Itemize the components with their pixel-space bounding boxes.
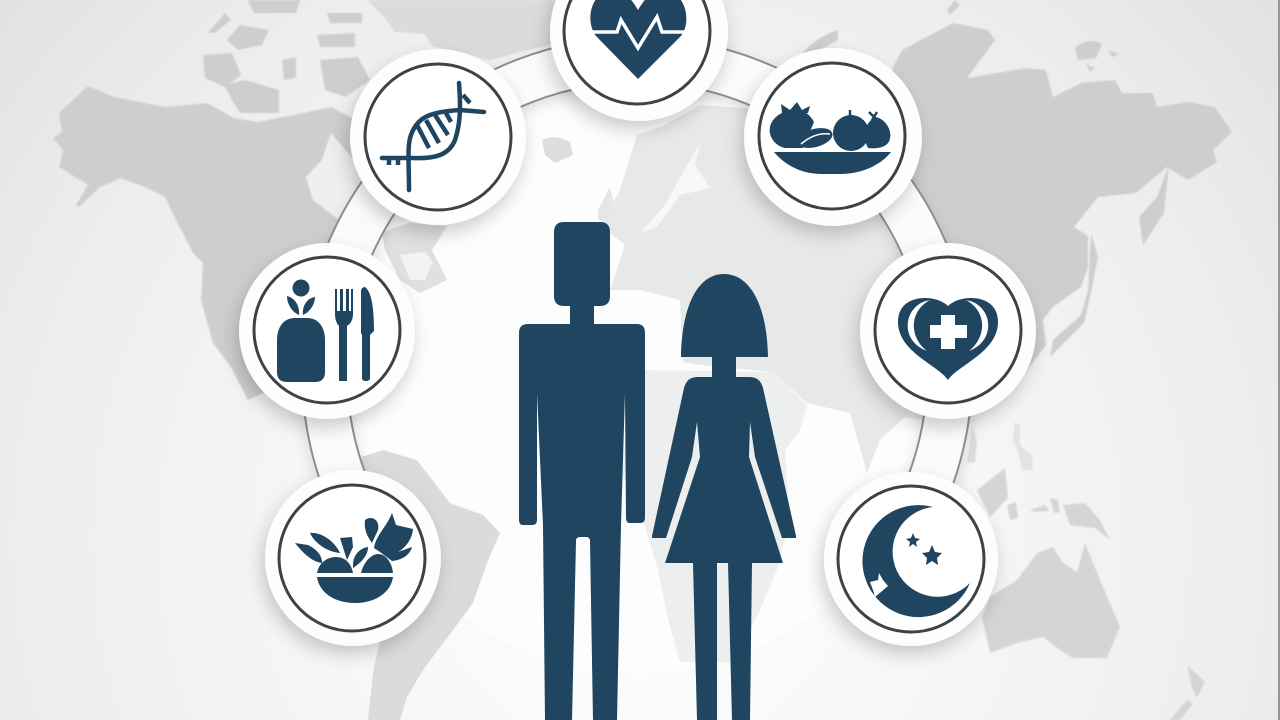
map: Cuba [400, 252, 433, 280]
inner map [350, 105, 925, 720]
map: New Zealand [1170, 665, 1205, 720]
map: South America [350, 450, 500, 720]
map: Indonesia islands [977, 468, 1110, 540]
map: Hudson Bay [306, 133, 372, 230]
map: Africa [620, 370, 807, 662]
icon badge: DNA helix [350, 49, 526, 225]
world map outer [53, 0, 1232, 400]
map: Greenland [367, 0, 560, 60]
map: Caribbean inner [382, 223, 447, 293]
map: Baltic [640, 143, 710, 233]
figure: man [519, 222, 645, 720]
icon badge: fruit bowl [744, 48, 922, 226]
map: Eurasia inner [600, 105, 925, 473]
map: Japan strip [1050, 233, 1098, 357]
map: Australia [982, 543, 1120, 658]
map: Arctic islands [203, 0, 370, 113]
map: Iceland [542, 137, 573, 163]
map: Great Britain [598, 187, 613, 220]
inner white disc [337, 72, 937, 672]
icon badge: heart with cross [860, 243, 1036, 419]
map: Malay strip [967, 427, 977, 463]
map: Asia [880, 23, 1232, 380]
map: Kamchatka [1139, 165, 1169, 245]
right edge strip [1278, 0, 1280, 720]
figure: woman [652, 274, 796, 720]
map: Australasia [967, 422, 1205, 720]
icon badge: food and cutlery [239, 243, 415, 419]
map: northern islands [802, 0, 1119, 72]
map: North America [53, 86, 375, 400]
icon badge: vegetable bowl [265, 470, 441, 646]
icon badge: heart with pulse [550, 0, 728, 121]
map: Philippines [1013, 422, 1033, 470]
icon badge: crescent moon and stars [824, 472, 998, 646]
connecting ring [325, 60, 950, 549]
